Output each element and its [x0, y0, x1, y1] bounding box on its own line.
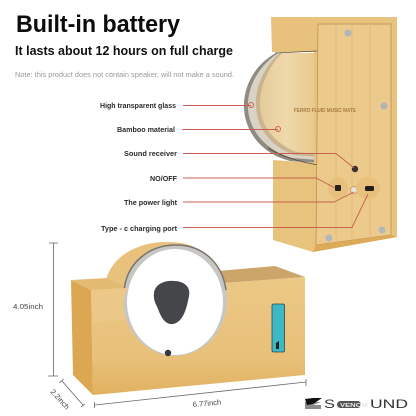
top block: [271, 17, 317, 52]
front left shoulder: [91, 288, 128, 322]
left side face: [71, 280, 93, 395]
main bamboo body: [273, 17, 397, 252]
label: on off: NO/OFF: [150, 174, 177, 183]
logo text: S: [324, 397, 335, 411]
feature labels: [100, 101, 177, 233]
dimension: depth: 2.2inch: [49, 387, 71, 411]
product: rear view of bamboo unit: [244, 17, 397, 252]
power light: [350, 186, 358, 194]
note: Note: this product does not contain speaker, will not make a sound.: [15, 72, 234, 79]
dark pick shape: [154, 281, 189, 324]
dimension: height: 4.05inch: [13, 302, 43, 311]
dimension: depth: [49, 379, 85, 411]
dimension: width: 6.77inch: [192, 398, 221, 409]
top of right block: [218, 266, 305, 283]
recessed switch area: [328, 177, 348, 199]
title: Built-in battery: [16, 11, 181, 38]
label: glass: High transparent glass: [100, 101, 176, 110]
callout lines: [182, 102, 368, 228]
teal display: [272, 304, 284, 352]
engraved brand text: FERRO FLUID MUSIC MATE: [294, 108, 357, 114]
logo: soundvenom: VENOM: [340, 403, 368, 409]
bottom edge: [313, 235, 397, 252]
dimension: width: [94, 379, 306, 409]
label: power light: The power light: [124, 198, 177, 207]
dimension: height: [13, 243, 58, 376]
front face: [91, 277, 305, 395]
product: front view of bamboo unit: [71, 242, 305, 395]
top of left block: [71, 278, 128, 290]
bamboo ring behind glass: [106, 242, 196, 290]
logo: soundvenom: UND: [370, 397, 408, 411]
label: charging port: Type - c charging port: [101, 224, 177, 233]
glass rim: [123, 244, 227, 356]
logo mark: [305, 402, 321, 409]
label: sound receiver: Sound receiver: [124, 149, 177, 158]
logo: soundvenom: [305, 397, 408, 411]
recessed port area: [356, 177, 380, 199]
sound receiver hole: [352, 166, 358, 172]
display icon: [276, 341, 279, 349]
on off switch: [335, 185, 341, 191]
subtitle: It lasts about 12 hours on full charge: [15, 43, 233, 58]
label: bamboo: Bamboo material: [117, 125, 175, 134]
type-c port: [365, 186, 374, 191]
rear panel: [316, 24, 391, 245]
glass and bamboo disc: [244, 53, 318, 163]
screws: [326, 30, 388, 242]
small knob: [165, 350, 171, 356]
notch shadow line: [268, 51, 318, 165]
white glass face: [127, 249, 223, 355]
